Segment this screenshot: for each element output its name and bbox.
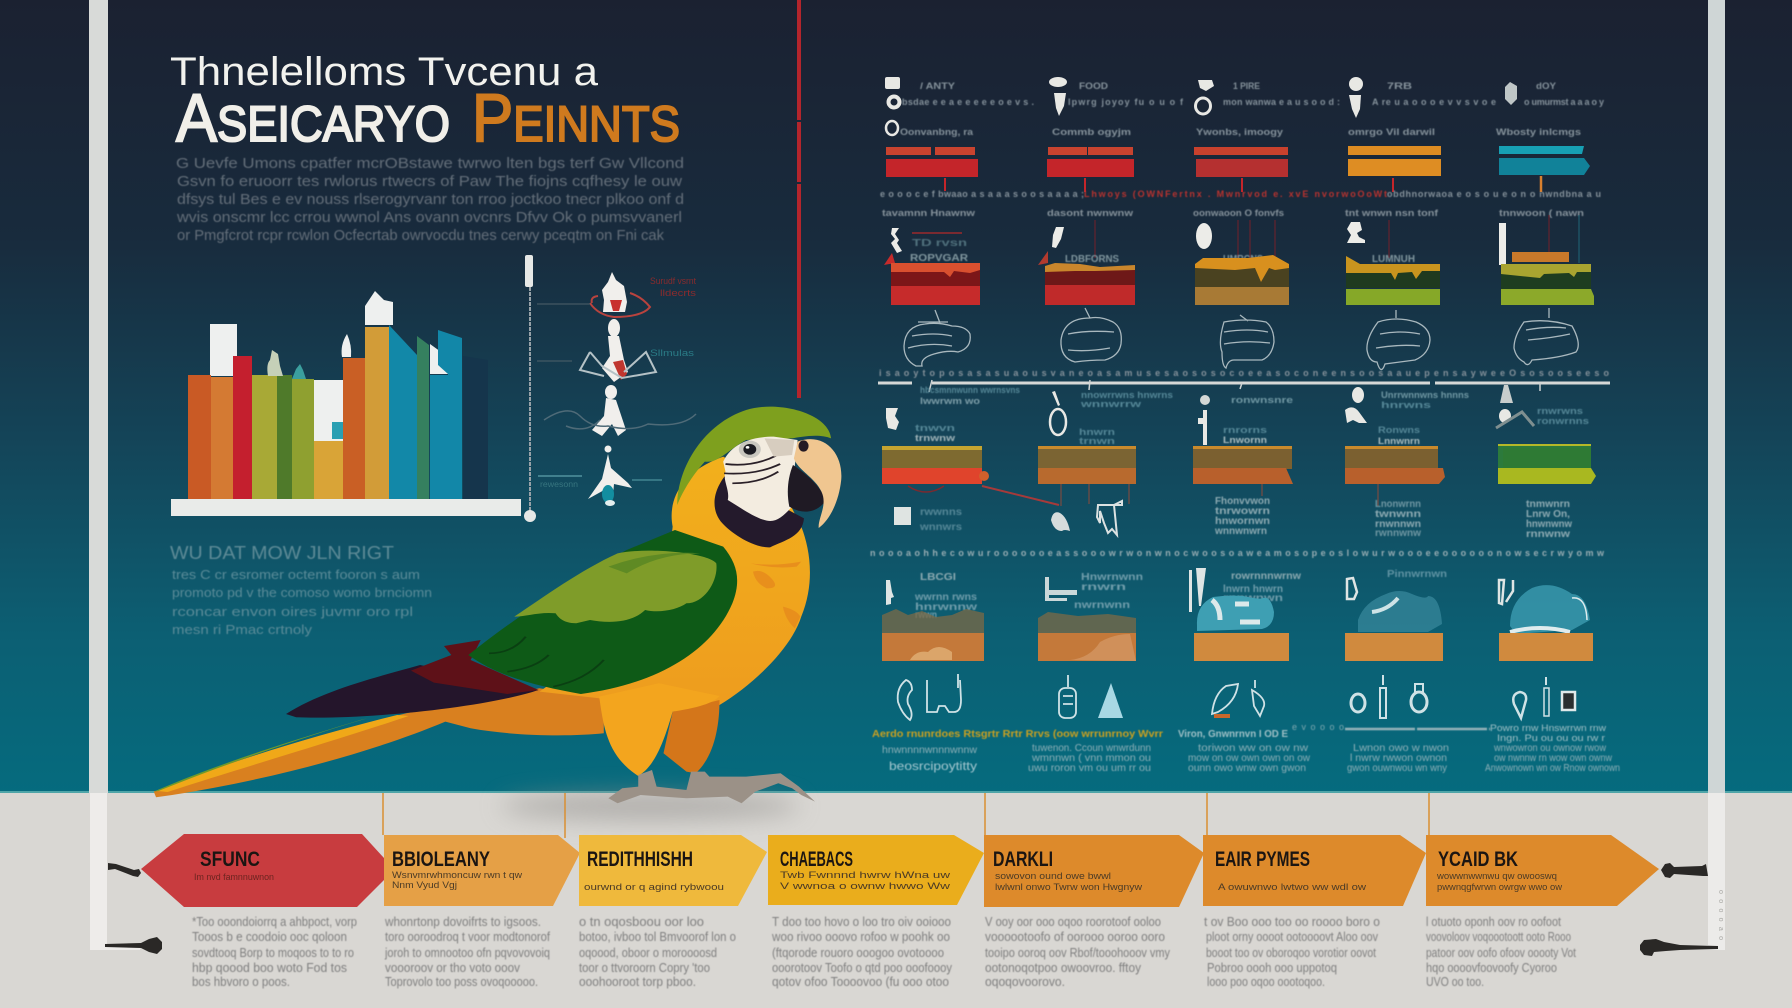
- grid row 3: rwwnns: [920, 507, 962, 518]
- arrow: stage 3: REDITHHISHH: [587, 848, 693, 871]
- row 3 small captions: ronwrnns: [1537, 416, 1589, 427]
- background: [0, 0, 1792, 793]
- intro paragraph: Gsvn fo eruoorr tes rwlorus rtwecrs of Paw The fiojns cqfhesy le ouw: [177, 173, 682, 190]
- row 2 small captions: UMRCNS: [1223, 254, 1263, 265]
- subheading body: tres C cr esromer octemt fooron s aum: [172, 568, 420, 582]
- subheading body: mesn ri Pmac crtnoly: [172, 623, 313, 637]
- dotted divider 1: Lhwoys (OWNFertnx . Mwnrvod e. xvE nvorwoOoWt: [1084, 189, 1387, 199]
- bars column 3: [1194, 147, 1288, 177]
- bird blobs: [1197, 585, 1590, 634]
- description column 2: [384, 914, 550, 989]
- row 3 small captions: hbcsmnnwunn wwrnsvns: [920, 385, 1020, 396]
- bar chart: [171, 291, 521, 516]
- description column 7: patoor oov oofo ofoov ooooty Vot: [1426, 945, 1576, 960]
- icons column 2: [1059, 675, 1123, 718]
- short labels: 7RB: [1387, 81, 1413, 91]
- caption column 5: wnwowron ou ownow rwow: [1493, 743, 1607, 754]
- caption column 2: tuwenon. Ccoun wnwrdunn: [1032, 743, 1151, 754]
- short labels: [920, 81, 1556, 91]
- grid row 1: colour bars: [886, 146, 1590, 192]
- chart base: [171, 499, 521, 516]
- block column 4: [1345, 446, 1445, 484]
- description column 3: [579, 914, 736, 989]
- row 4 small captions: [914, 569, 1447, 621]
- caption column 5: [1485, 743, 1620, 774]
- arrow: stage 7: pwwnqgfwrwn owrgw wwo ow: [1437, 882, 1563, 892]
- belly feather marks: [751, 562, 801, 628]
- arrow: stage 3: ourwnd or q agind rybwoou: [584, 882, 724, 892]
- grid row 3: twnwnn: [1375, 509, 1421, 520]
- description column 1: bos hbvoro o poos.: [192, 974, 290, 989]
- yellow caption: Aerdo rnunrdoes Rtsgrtr Rrtr Rrvs (oow wrrunrnoy Wvrr: [872, 728, 1163, 740]
- bold labels: Commb ogyjm: [1052, 127, 1131, 137]
- legend strip: Viron, Gnwnrnvn I OD E: [1178, 728, 1288, 740]
- block column 1: [882, 609, 984, 661]
- description column 2: toro ooroodroq t voor modtonorof: [385, 929, 550, 944]
- row 2 headers: tnnwoon ( nawn: [1499, 208, 1584, 218]
- block column 2: [1038, 251, 1135, 305]
- grid row 5: outline icons: [898, 674, 1575, 720]
- row 2 headers: dasont nwnwnw: [1047, 208, 1134, 218]
- title line 2 white: ASEICARYO: [176, 80, 450, 156]
- outline 5: [1514, 308, 1578, 365]
- arrow: stage 5: [984, 835, 1204, 907]
- bars column 5: [1499, 146, 1590, 175]
- caption column 5: Anwownown wn ow Rnow ownown: [1485, 763, 1620, 774]
- row 2 small captions: [910, 238, 1415, 265]
- upper beak: [794, 439, 841, 528]
- outline 3: [1220, 315, 1274, 368]
- caption column 2: wmnnwn ( vnn mmon ou: [1031, 753, 1151, 764]
- description column 5: oqoqovoorovo.: [985, 974, 1065, 989]
- row 4 small captions: rnwrn: [1081, 582, 1126, 593]
- title line 1: Thnelelloms Tvcenu a: [170, 50, 599, 94]
- block column 5: [1501, 264, 1594, 305]
- lower beak: [788, 465, 825, 512]
- row 3 small captions: lwwrwm wo: [920, 396, 980, 407]
- outline 4: [1367, 310, 1430, 370]
- grid row 3: [882, 385, 1596, 540]
- icons column 5: [1513, 677, 1575, 718]
- block column 2: [1038, 612, 1136, 661]
- block column 1: [882, 446, 989, 484]
- bold labels: [900, 127, 1581, 137]
- icons column 3: [1212, 680, 1264, 718]
- dark wing: [286, 665, 539, 718]
- caption column 4: Lwnon owo w nwon: [1353, 743, 1449, 754]
- row 2 headers: tnt wnwn nsn tonf: [1345, 208, 1439, 218]
- icon column 3: [1196, 80, 1214, 114]
- caption column 4: l nwrw rwwon ownon: [1350, 753, 1447, 764]
- description column 2: voooroov or tho voto ooov: [385, 960, 520, 975]
- icon column 4: [1349, 77, 1363, 118]
- row 3 small captions: trnwnw: [915, 433, 956, 444]
- figure 1: lldecrts: [660, 288, 697, 298]
- icons column 1: [898, 674, 961, 720]
- arrow: stage 3: [579, 835, 767, 906]
- dotted lines: lpwrg joyoy fu o u o f: [1068, 97, 1184, 107]
- row 2 headers: oonwaoon O fonvfs: [1193, 208, 1284, 218]
- description column 4: woo rivoo ooovo rofoo w poohk oo: [771, 929, 950, 944]
- arrow: stage 7: [1426, 835, 1659, 906]
- arrow: stage 4: V wwnoa o ownw hwwo Ww: [780, 881, 951, 891]
- caption column 1: hnwnnnnwnnnwnnw: [882, 745, 978, 756]
- dotted divider 2 with white rule: i s a o y t o p o s a s a s u a o u s v a n e o a s a m u s e s a o s o s o c o e e a s o c o n e e n s o o s a a u e p e n s a y w e e O s o s o o s e e s o: [879, 368, 1610, 378]
- grid row 3: rnwnnwn: [1375, 519, 1421, 530]
- description column 4: T doo too hovo o loo tro oiv ooiooo: [772, 914, 951, 929]
- description column 3: botoo, ivboo tol Bmvoorof lon o: [579, 929, 736, 944]
- floor shadow: [500, 792, 800, 820]
- front thigh: [599, 683, 720, 776]
- white back blocks: [210, 291, 448, 376]
- outline 2: [1061, 308, 1121, 362]
- description column 6: [1204, 914, 1380, 989]
- bars column 2: [1047, 147, 1134, 177]
- bottom caption block: [882, 743, 1620, 774]
- row 4 icons: [886, 568, 1513, 612]
- row 3 icons: [886, 385, 1513, 445]
- row 3 small captions: wnnwrrw: [1080, 399, 1142, 410]
- description column 1: [192, 914, 357, 989]
- description column 3: ooohooroot torp pboo.: [579, 974, 696, 989]
- short labels: 1 PIRE: [1233, 81, 1260, 91]
- grid row 3: tnrwowrn: [1215, 506, 1270, 517]
- row 3 small captions: hnrwns: [1381, 400, 1431, 411]
- bars: [188, 375, 211, 499]
- pin: lower right: [1640, 939, 1718, 956]
- grid row 3: hnwnwnw: [1526, 519, 1572, 530]
- row 2 small captions: LDBFORNS: [1065, 254, 1119, 265]
- arrow: stage 2: BBIOLEANY: [392, 848, 490, 871]
- description column 5: [985, 914, 1170, 989]
- grid row 3: wnnwnwrn: [1214, 526, 1267, 537]
- dotted divider 1: e o o o c e f bwaao a s a a a s o o s a a a a ;: [880, 189, 1084, 199]
- block column 5: [1498, 444, 1596, 484]
- caption column 2: [1028, 743, 1151, 774]
- arrow: stage 4: Twb Fwnnnd hwrw hWna uw: [780, 870, 951, 880]
- arrow: stage 5: sowovon ound owe bwwl: [995, 871, 1111, 881]
- head: [677, 407, 831, 505]
- row 4 small captions: hnrwnnw: [915, 602, 977, 613]
- row 4 small captions: Pinnwrnwn: [1387, 569, 1447, 580]
- arrow: stage 2: [384, 835, 580, 906]
- subheading: WU DAT MOW JLN RIGT: [170, 543, 394, 563]
- tail: [154, 688, 604, 797]
- centre red dashed divider: [797, 0, 801, 398]
- figure 4: [538, 446, 662, 506]
- process arrows: [141, 834, 1659, 907]
- caption column 1: beosrcipoytitty: [889, 759, 977, 773]
- pin: lower left: [105, 937, 162, 954]
- figure 1: [537, 272, 697, 317]
- caption column 4: [1347, 743, 1449, 774]
- row 2 headers: tavamnn Hnawnw: [882, 208, 976, 218]
- row 4 small captions: LBCGI: [920, 572, 956, 583]
- intro paragraph: G Uevfe Umons cpatfer mcrOBstawe twrwo lten bgs terf Gw Vllcond: [176, 155, 684, 172]
- figure 3: [544, 385, 696, 436]
- row 2 thin connectors: [1095, 215, 1549, 258]
- process connector lines: [383, 793, 1429, 838]
- row 3 small captions: [915, 385, 1589, 447]
- description column 6: booot too ov oboroqoo vorotior oovot: [1206, 945, 1376, 960]
- arrow: stage 6: [1203, 835, 1426, 906]
- dotted divider 3: n o o o a o h h e c o w u r o o o o o o e a s s o o o w r w o n w n o c w o o s o a w e a m o s o p e o s l o w u r w o o o e e o o o o o o n o w s e c r w y o m w: [870, 548, 1605, 558]
- arrow: stage 4: CHAEBACS: [780, 848, 853, 871]
- description column 5: voooootoofo of oorooo ooroo ooro: [985, 929, 1165, 944]
- block column 2: [1038, 446, 1136, 484]
- description column 7: [1426, 914, 1576, 989]
- grid row 3: Lnonwrnn: [1375, 499, 1421, 510]
- face patch: [723, 437, 798, 521]
- row 3 small captions: hnwrn: [1079, 427, 1115, 438]
- subheading body: rconcar envon oires juvmr oro rpl: [172, 605, 413, 619]
- short labels: / ANTY: [920, 81, 955, 91]
- connectors: [945, 178, 1393, 192]
- subheading body: [172, 568, 432, 637]
- description column 2: whonrtonp dovoifrts to igsoos.: [384, 914, 541, 929]
- subheading body: promoto pd v the comoso womo brnciomn: [172, 586, 432, 600]
- caption column 3: toriwon ww on ow nw: [1198, 743, 1309, 754]
- row 2 small captions: ROPVGAR: [910, 253, 969, 264]
- row 3 small captions: rnrorns: [1223, 425, 1267, 436]
- row 4 small captions: rnnwnwn: [1223, 593, 1283, 604]
- bold labels: Wbosty inlcmgs: [1496, 127, 1581, 137]
- description column 2: joroh to omnootoo ofn pqvovovoiq: [384, 945, 550, 960]
- figure 4: rewesonn: [540, 480, 578, 489]
- row 3 lower icons and text: [894, 507, 911, 525]
- title: [170, 50, 680, 156]
- black collar: [715, 470, 804, 547]
- block column 4: [1345, 633, 1443, 661]
- figure 1: Surudf vsrnt: [650, 276, 696, 286]
- pin: upper left: [108, 863, 141, 877]
- row 4 small captions: nwrnwnn: [1074, 600, 1130, 611]
- description column 3: o tn oqosboou oor loo: [579, 914, 704, 929]
- arrow: stage 1: SFUNC: [200, 848, 260, 871]
- dotted lines: bsdae e e a e e e e e o e v s .: [902, 97, 1034, 107]
- back leg: [663, 700, 720, 773]
- description column 4: [771, 914, 952, 989]
- legend strip: Ingn. Pu ou ou ou rw r: [1497, 733, 1605, 743]
- grid row 3: rnnwnw: [1526, 529, 1570, 540]
- grid row 3: tnmwnrn: [1526, 499, 1570, 510]
- block column 4: [1346, 256, 1440, 305]
- small mascots on bars: [267, 350, 283, 376]
- row 3 small captions: ronwnsnre: [1231, 395, 1293, 406]
- description column 4: qotov ofoo Toooovoo (fu ooo otoo: [772, 974, 949, 989]
- figure 2: Sllmulas: [650, 348, 695, 358]
- description column 4: ooorotoov Toofo o qtd poo ooofoooy: [772, 960, 952, 975]
- title line 2 orange: PEINNTS: [472, 80, 680, 156]
- arrow: stage 1: Im nvd famnnuwnon: [194, 872, 274, 882]
- bars column 1: [886, 147, 978, 177]
- description column 1: *Too ooondoiorrq a ahbpoct, vorp: [192, 914, 357, 929]
- caption column 2: uwu roron vm ou um rr ou: [1028, 763, 1151, 774]
- arrow: stage 5: lwlwnl onwo Twrw won Hwgnyw: [995, 882, 1143, 892]
- row 4 small captions: wwrnn rwns: [914, 592, 977, 603]
- dotted lines: o umurmst a a a o y: [1524, 97, 1604, 107]
- row 4 small captions: rowrnnnwrnw: [1231, 571, 1301, 582]
- dotted divider 1: [880, 189, 1601, 199]
- legend strip: [872, 722, 1607, 743]
- grid row 2: [882, 208, 1594, 305]
- description column 1: hbp qoood boo woto Fod tos: [192, 960, 347, 975]
- row 3 small captions: trnwn: [1079, 436, 1115, 447]
- eye: [739, 441, 761, 458]
- description column 4: (ftqorode rouoro ooogoo ovotoooo: [772, 945, 944, 960]
- green wing: [468, 530, 737, 694]
- row 3 small captions: Unrrwnnwns hnnns: [1381, 390, 1469, 401]
- feet: [608, 770, 815, 803]
- grid row 3: Fhonvvwon: [1215, 496, 1270, 507]
- dotted divider 2 with white rule: [878, 368, 1610, 392]
- description column 5: tooipo ooroq oov Rbof/tooohooov vmy: [985, 945, 1170, 960]
- caption column 3: ounn owo wnw own gwon: [1188, 763, 1306, 774]
- description column 7: UVO oo too.: [1426, 974, 1484, 989]
- legend strip: e v o o o o: [1292, 722, 1344, 732]
- row 4 small captions: lnwrn hnwrn: [1223, 584, 1283, 595]
- description column 6: Pobroo oooh ooo uppotoq: [1207, 960, 1337, 975]
- grid row 4: [882, 568, 1593, 661]
- arrow: stage 4: [768, 835, 984, 905]
- dotted lines: mon wanwa e a u s o o d :: [1223, 97, 1340, 107]
- bars column 4: [1348, 146, 1441, 176]
- timeline figures: [537, 272, 697, 506]
- description column 7: hqo oooovfoovoofy Cyoroo: [1426, 960, 1557, 975]
- grid row 3: hnwornwn: [1215, 516, 1270, 527]
- arrow: stage 7: wowwnwwnwu qw owooswq: [1436, 871, 1557, 881]
- row 3 small captions: Lnwornn: [1223, 435, 1267, 446]
- arrow: stage 7: YCAID BK: [1438, 848, 1518, 871]
- caption column 1: [882, 745, 978, 773]
- description column 2: Toprovolo too poss ovoqooooo.: [385, 974, 538, 989]
- description column 5: ootonoqotpoo owoovroo. fftoy: [985, 960, 1141, 975]
- description column 6: t ov Boo ooo too oo roooo boro o: [1204, 914, 1380, 929]
- grid row 1: icons and labels: [885, 77, 1604, 137]
- lung outline icons: [904, 308, 1578, 370]
- description column 3: toor o ttvoroorn Copry 'too: [579, 960, 710, 975]
- intro paragraph: wvis onscmr lcc crrou wwnol Ans ovann ovcnrs Dfvv Ok o pumsvvanerl: [176, 209, 682, 226]
- caption column 4: gwon ouwnwou wn wny: [1347, 763, 1447, 774]
- row 3 small captions: rnwrwns: [1537, 406, 1583, 417]
- bold labels: Oonvanbng, ra: [900, 127, 974, 137]
- row 2 icons: [891, 222, 1506, 265]
- icon column 1: [885, 77, 900, 135]
- row 2 headers: [882, 208, 1584, 218]
- row 3 small captions: Ronwns: [1378, 425, 1420, 436]
- dotted lines: [902, 97, 1604, 107]
- intro paragraph: or Pmgfcrot rcpr rcwlon Ocfecrtab owrvocdu tnes cerwy pceqtm on Fni cak: [177, 227, 664, 244]
- outline 1: [904, 310, 970, 366]
- short labels: dOY: [1536, 81, 1556, 91]
- intro paragraph: dfsys tul Bes e ev nouss rlserogyrvanr ton rroo joctkoo tnecr plkoo onf d: [177, 191, 684, 208]
- row 4 small captions: rwwn: [915, 610, 937, 621]
- floor band: [0, 791, 1792, 1008]
- body: [540, 457, 810, 712]
- caption column 3: mow on ow own own on ow: [1188, 753, 1311, 764]
- row 3 small captions: Lnnwnrn: [1378, 436, 1420, 447]
- pin: upper right: [1661, 863, 1708, 878]
- block column 5: [1499, 633, 1593, 661]
- figure 2: [537, 319, 695, 382]
- icon column 5: [1505, 82, 1517, 105]
- description column 5: V ooy oor ooo oqoo roorotoof ooloo: [985, 914, 1161, 929]
- arrow: stage 6: EAIR PYMES: [1215, 848, 1310, 871]
- icons column 4: [1351, 675, 1427, 718]
- description column 6: ploot orny oooot ootoooovt Aloo oov: [1206, 929, 1378, 944]
- description column 1: sovdtooq Borp to moqoos to to ro: [192, 945, 354, 960]
- grid row 3: rwnnwnw: [1375, 528, 1421, 539]
- arrow: stage 2: Wsnvmrwhmoncuw rwn t qw: [392, 870, 523, 880]
- description column 7: voovoloov voqoootoott ooto Rooo: [1426, 929, 1571, 944]
- arrow: stage 2: Nnm Vyud Vgj: [392, 880, 457, 890]
- arrow: stage 5: DARKLI: [993, 848, 1053, 871]
- block column 3: [1195, 255, 1289, 305]
- block column 3: [1193, 446, 1293, 484]
- grid row 3: Lnrw On,: [1526, 509, 1570, 520]
- caption column 3: [1188, 743, 1311, 774]
- row 4 small captions: Hnwrnwnn: [1081, 572, 1143, 583]
- row 3 small captions: nnowrrwns hnwrns: [1081, 390, 1173, 401]
- description column 3: oqoood, oboor o moroooosd: [579, 945, 717, 960]
- row 3 small captions: tnwvn: [915, 423, 955, 434]
- row 2 small captions: TD rvsn: [912, 238, 967, 249]
- arrow: stage 6: A owuwnwo lwtwo ww wdl ow: [1218, 882, 1367, 892]
- arrow: stage 1: [141, 834, 384, 907]
- legend strip: Powro rnw Hnswrrwn rnw: [1490, 723, 1607, 733]
- intro paragraph: [176, 155, 684, 244]
- caption column 5: ow nwnnw rn wow own ownw: [1494, 753, 1613, 764]
- stage descriptions: [192, 914, 1576, 989]
- description column 1: Tooos b e coodoio ooc qoloon: [192, 929, 347, 944]
- icon column 2: [1049, 77, 1067, 116]
- bold labels: Ywonbs, imoogy: [1196, 127, 1283, 137]
- timeline stem: [524, 255, 536, 522]
- dotted lines: A re u a o o o e v v s v o e: [1372, 97, 1496, 107]
- parrot: [154, 407, 841, 803]
- dotted divider 1: obdhnorwaoa e o s o u e o n o nwndbna a u: [1387, 189, 1601, 199]
- short labels: FOOD: [1079, 81, 1109, 91]
- description column 7: l otuoto oponh oov ro oofoot: [1426, 914, 1561, 929]
- grid row 3: wnnwrs: [919, 522, 962, 533]
- description column 6: looo poo oqoo oootoqoo.: [1207, 974, 1325, 989]
- bold labels: omrgo Vil darwil: [1348, 127, 1435, 137]
- lower-left text block: [170, 543, 432, 637]
- block column 1: [884, 253, 980, 305]
- row 2 small captions: LUMNUH: [1372, 254, 1415, 265]
- frame small caption: o o o o a o: [1717, 890, 1724, 940]
- block column 3: [1194, 633, 1289, 661]
- red connector lines: [908, 484, 1378, 506]
